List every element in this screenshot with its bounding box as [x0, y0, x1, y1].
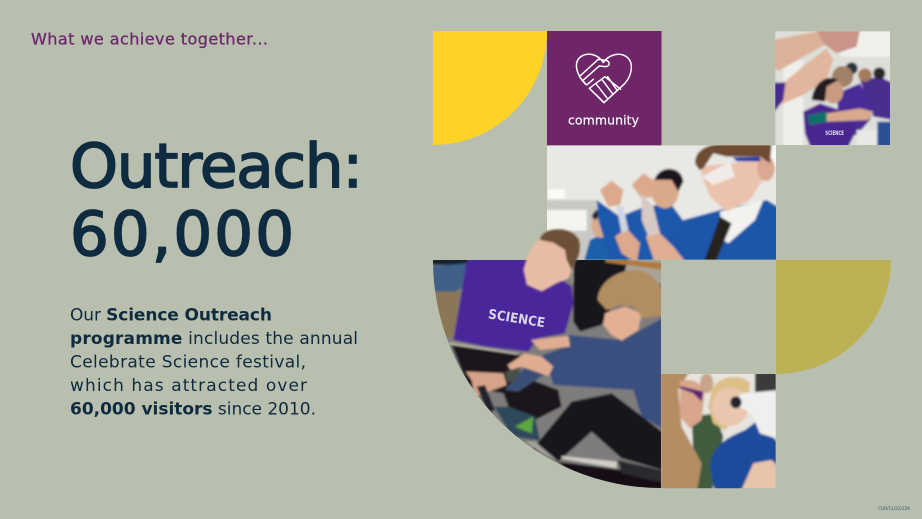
- title: Outreach:: [70, 131, 363, 202]
- body text: which has attracted over: [70, 376, 307, 396]
- body text: [70, 306, 358, 420]
- title: [70, 131, 363, 270]
- community label: community: [568, 112, 640, 128]
- body text: Celebrate Science festival,: [70, 352, 306, 372]
- t-shirt lettering: SCIENCE: [487, 307, 546, 331]
- eyebrow heading: What we achieve together...: [31, 30, 268, 48]
- yellow quarter circle: [433, 31, 547, 145]
- body text: Our Science Outreach: [70, 306, 272, 326]
- body text: programme includes the annual: [70, 329, 358, 349]
- man's head above the photo edge: [523, 229, 580, 292]
- icon: heart with clasped hands: [576, 54, 631, 103]
- photo: volunteers in purple t-shirts: [775, 31, 890, 145]
- photo: woman and child at microscope: [661, 374, 776, 488]
- reference code: CUR/11/22/229: [878, 506, 910, 512]
- panel: community: [547, 31, 662, 146]
- olive quarter circle: [776, 260, 891, 374]
- title: 60,000: [70, 199, 294, 270]
- body text: 60,000 visitors since 2010.: [70, 400, 316, 420]
- photo: pupils in blue lab coats: [547, 145, 776, 260]
- t-shirt lettering: SCIENCE: [825, 130, 844, 137]
- photo: man and boy on rowing machine: [425, 229, 668, 497]
